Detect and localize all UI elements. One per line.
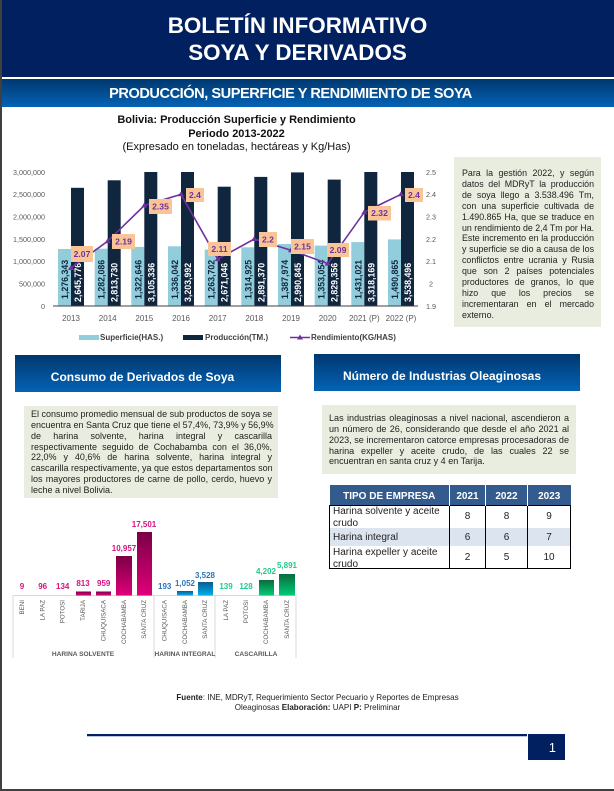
combo chart: superficie, producción, rendimiento [13,168,436,342]
superficie value labels: 1,282,086 [97,260,107,299]
text panel: producción 2022: externo. [462,310,494,320]
department labels: BENI [19,600,26,614]
year labels: 2022 (P) [386,314,417,323]
year labels: 2015 [135,314,154,323]
harina solvente bars: 17,501 [132,520,157,529]
chart title: (Expresado en toneladas, hectáreas y Kg/Has) [122,141,351,153]
cascarilla bars: 5,891 [277,561,298,570]
harina solvente bars: 813 [76,579,90,588]
table: tipo de empresa: 2022 [495,491,518,502]
superficie value labels [60,260,400,299]
text panel: industrias: Las industrias oleaginosas a nivel nacional, ascendieron a [329,413,569,423]
section banner: producción [2,79,614,107]
rendimiento value tags: 2.2 [262,234,274,244]
year labels: 2017 [209,314,227,323]
department labels: SANTA CRUZ [202,600,209,639]
text panel: producción 2022: un rendimiento de 2,4 Tm por Ha. [462,223,594,233]
year labels: 2021 (P) [349,314,380,323]
table: tipo de empresa [329,485,571,570]
department labels: CHUQUISACA [101,599,108,641]
title banner [2,0,614,77]
chart title [117,114,356,153]
department labels: LA PAZ [40,600,47,621]
text panel: producción 2022: 1.490.865 Ha, que se traduce en [462,212,594,222]
harina solvente bars: 96 [38,582,48,591]
department labels [19,599,291,644]
table: tipo de empresa: 8 [465,511,470,522]
superficie value labels: 1,276,343 [60,260,70,299]
year labels: 2018 [245,314,264,323]
text panel: industrias: un número de 26, considerando que desde el año 2021 al [329,424,569,434]
producción value labels: 3,318,169 [366,263,376,302]
producción value labels: 2,829,356 [330,263,340,302]
year labels: 2020 [319,314,337,323]
department labels: CHUQUISACA [162,599,169,641]
harina solvente bars [20,520,157,596]
department labels: POTOSI [243,600,250,623]
producción value labels: 2,891,370 [256,263,266,302]
text panel: producción 2022: con una superficie cultivada de [462,201,594,211]
producción value labels: 2,813,730 [110,263,120,302]
rendimiento value tags: 2.11 [211,244,228,254]
table: tipo de empresa: 7 [546,532,552,543]
right axis labels: 2 [429,280,433,288]
bar chart: consumo por departamento [12,520,298,658]
table: tipo de empresa: Harina integral [333,532,398,543]
text panel: producción 2022: Este incremento en la producción [462,233,594,243]
text panel: producción 2022: productores de granos, lo que [462,277,594,287]
text panel: industrias: harina expeller y aceite crudo, de las cuales 22 se [329,446,569,456]
text panel: producción 2022: datos del MDRyT la producción [462,179,594,189]
table: tipo de empresa: Harina solvente y aceite crudo [333,506,440,529]
group labels: CASCARILLA [235,651,278,658]
text panel: consumo: El consumo promedio mensual de sub productos de soya se [31,409,272,419]
rendimiento value tags: 2.4 [408,190,420,200]
rendimiento value tags: 2.32 [371,208,388,218]
harina solvente bars: 9 [20,582,25,591]
left axis labels: 1,000,000 [13,257,45,266]
year labels [62,314,417,323]
text panel: consumo: cascarilla respectivamente, ya que estos departamentos son [31,463,273,473]
rendimiento value tags: 2.35 [152,202,169,212]
heading: consumo de derivados [15,355,281,392]
year labels: 2014 [99,314,117,323]
table: tipo de empresa: 5 [504,552,509,563]
harina integral bars: 193 [158,582,172,591]
superficie bars [58,239,401,306]
text panel: industrias: encuentran en santa cruz y 4 en Tarija. [329,456,485,466]
chart title: Periodo 2013-2022 [188,128,285,140]
table: tipo de empresa: 6 [465,532,470,543]
heading: número de industrias [314,354,580,391]
harina solvente bars: 959 [97,579,111,588]
table: tipo de empresa: 2 [465,552,470,563]
chart legend: Rendimiento(KG/HAS) [311,333,396,342]
rendimiento line [68,191,404,270]
group labels: HARINA INTEGRAL [155,651,215,658]
page number [528,734,565,760]
left axis labels: 2,500,000 [13,190,45,199]
harina integral bars: 3,528 [195,571,216,580]
chart title: Bolivia: Producción Superficie y Rendimiento [117,114,356,126]
year labels: 2013 [62,314,80,323]
text panel: industrias: 2023, se incrementaron catorce empresas procesadoras de [329,435,569,445]
source note: Oleaginosas Elaboración: UAPI P: Preliminar [235,703,400,712]
department labels: POTOSI [60,600,67,623]
producción value labels: 3,203,992 [183,263,193,302]
table: tipo de empresa: 9 [546,511,552,522]
rendimiento value tags: 2.15 [294,242,311,252]
department labels: SANTA CRUZ [141,600,148,639]
superficie value labels: 1,431,021 [353,260,363,299]
left axis labels [13,168,45,311]
heading: número de industrias: Número de Industrias Oleaginosas [343,369,541,383]
text panel: producción 2022: incrementaran en el mercado [462,299,594,309]
right axis labels: 2.1 [426,257,436,266]
table: tipo de empresa: 10 [543,552,555,563]
producción value labels: 2,671,046 [220,263,230,302]
text panel: consumo: los mayores productores de carne de pollo, cerdo, huevo y [31,474,272,484]
superficie value labels: 1,353,054 [317,260,327,299]
text panel: consumo: de harina solvente, harina integral y cascarilla [31,431,272,441]
superficie value labels: 1,490,865 [390,260,400,299]
producción value labels: 2,990,845 [293,263,303,302]
group labels [52,651,278,658]
table: tipo de empresa: Harina expeller y aceite crudo [333,547,438,570]
text panel: producción 2022 [454,157,601,327]
source note [176,693,459,712]
producción value labels: 2,645,776 [73,263,83,302]
superficie value labels: 1,322,646 [133,260,143,299]
heading: consumo de derivados: Consumo de Derivados de Soya [51,370,234,384]
section banner: producción: PRODUCCIÓN, SUPERFICIE Y RENDIMIENTO DE SOYA [109,86,472,102]
rendimiento value tags: 2.07 [74,249,91,259]
text panel: industrias [322,405,576,474]
text panel: consumo: respectivamente seguido de Cochabamba con el 36,0%, [31,442,272,452]
right axis labels: 2.3 [426,212,436,222]
cascarilla bars: 128 [239,582,253,591]
harina solvente bars: 134 [56,582,70,591]
superficie value labels: 1,314,925 [243,260,253,299]
harina integral bars: 1,052 [175,579,196,588]
rendimiento value tags [71,188,423,262]
superficie value labels: 1,336,042 [170,260,180,299]
text panel: producción 2022: y superficie se dio a causa de los [462,244,594,254]
producción value labels: 3,538,496 [403,263,413,302]
text panel: consumo: 22,0% y 40,6% de harina solvente, harina integral y [31,452,272,462]
left axis labels: 0 [41,302,45,311]
chart legend [79,333,396,342]
table: tipo de empresa: 2023 [538,491,560,502]
table: tipo de empresa: 8 [504,511,509,522]
right axis labels: 2.4 [426,190,436,199]
department labels: LA PAZ [223,600,230,621]
harina integral bars [158,571,216,596]
department labels: COCHABAMBA [121,599,128,644]
cascarilla bars: 139 [219,582,233,591]
table: tipo de empresa: 6 [504,532,509,543]
text panel: consumo: leche a nivel Bolivia. [31,485,113,495]
department labels: SANTA CRUZ [284,600,291,639]
group labels: HARINA SOLVENTE [52,651,115,658]
superficie value labels: 1,263,702 [207,260,217,299]
left axis labels: 3,000,000 [13,168,45,177]
text panel: producción 2022: de soya llego a 3.538.496 Tm, [462,190,594,200]
year labels: 2016 [172,314,190,323]
chart legend: Producción(TM.) [205,333,268,342]
producción value labels: 3,105,336 [146,263,156,302]
page number: 1 [549,740,556,755]
left axis labels: 500,000 [19,280,45,288]
text panel: producción 2022: Para la gestión 2022, y según [462,168,594,178]
chart legend: Superficie(HAS.) [100,333,163,342]
text panel: consumo [24,406,278,498]
source note: Fuente: INE, MDRyT, Requerimiento Sector Pecuario y Reportes de Empresas [176,693,459,702]
table: tipo de empresa: TIPO DE EMPRESA [343,491,435,502]
year labels: 2019 [282,314,300,323]
left axis labels: 2,000,000 [13,212,45,222]
right axis labels: 1.9 [426,302,436,311]
left axis labels: 1,500,000 [13,235,45,244]
text panel: producción 2022: hizo que los precios se [462,288,594,298]
right axis labels [426,168,436,311]
producción value labels [73,263,413,302]
superficie value labels: 1,387,974 [280,260,290,299]
right axis labels: 2.5 [426,168,436,177]
text panel: consumo: encuentra en Santa Cruz que tiene el 57,4%, 73,9% y 56,9% [31,420,274,430]
cascarilla bars: 4,202 [256,567,277,576]
cascarilla bars [219,561,298,596]
title banner: BOLETÍN INFORMATIVO [168,13,427,38]
rendimiento value tags: 2.19 [115,236,132,246]
rendimiento value tags: 2.4 [189,190,201,200]
producción bars [71,172,414,306]
harina solvente bars: 10,957 [112,544,137,553]
department labels: COCHABAMBA [182,599,189,644]
text panel: producción 2022: que son 2 países potenciales [462,266,594,276]
right axis labels: 2.2 [426,235,436,244]
department labels: TARIJA [80,599,87,621]
department labels: COCHABAMBA [263,599,270,644]
table: tipo de empresa: 2021 [456,491,479,502]
title banner: SOYA Y DERIVADOS [188,40,407,65]
text panel: producción 2022: conflictos entre ucrania y Rusia [462,255,594,265]
rendimiento value tags: 2.09 [330,245,347,255]
